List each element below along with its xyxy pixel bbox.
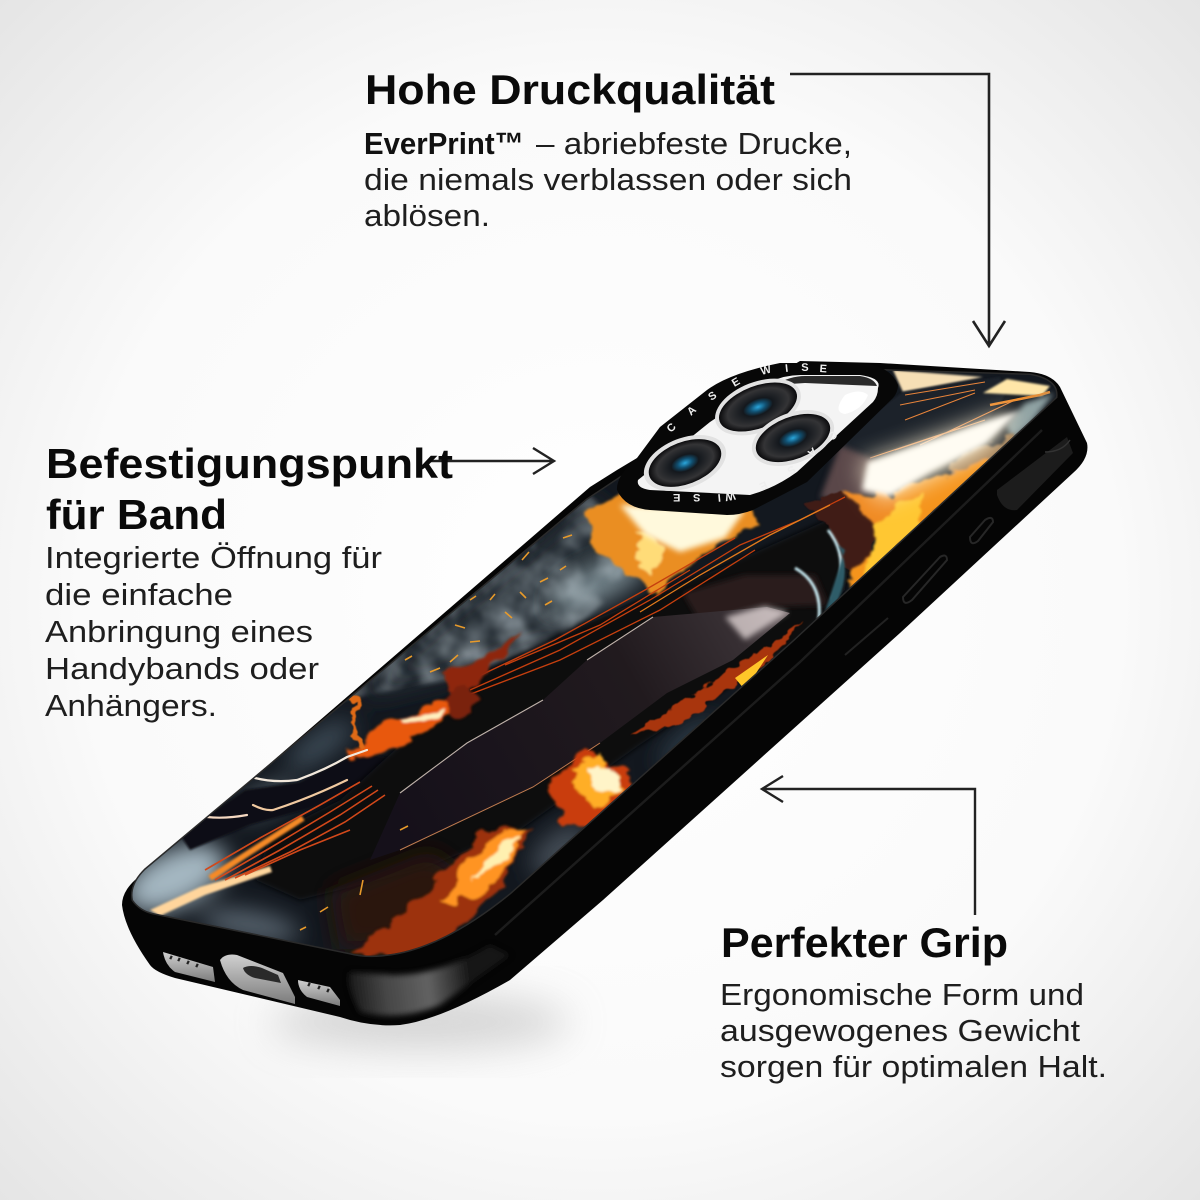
top-right dark wing <box>846 378 1004 454</box>
text block: print quality: die niemals verblassen oder sich <box>364 162 852 197</box>
phone case <box>113 360 1087 1025</box>
arrow: to printed back <box>790 74 1005 346</box>
upper thigh <box>683 573 828 614</box>
smoke texture <box>348 496 624 701</box>
brand lettering top: CASEWISE <box>665 362 827 435</box>
text block: grip <box>720 977 1107 1084</box>
brown rock right <box>805 492 880 575</box>
phone shadow <box>270 994 570 1050</box>
blue-white highlight <box>795 530 841 625</box>
case side details <box>495 430 1073 935</box>
charging port <box>220 955 295 1004</box>
wing light lines <box>870 382 1015 458</box>
text block: strap attachment: Anhängers. <box>45 688 217 723</box>
lens right <box>744 399 842 477</box>
lens left <box>636 424 734 502</box>
screen rim <box>132 368 1056 956</box>
bottom corner highlight <box>349 945 510 1016</box>
smoke and sky <box>113 495 728 947</box>
orange strands on body <box>455 497 845 700</box>
callout: strap attachment <box>45 440 453 723</box>
text block: print quality: ablösen. <box>364 198 490 233</box>
callout: grip <box>720 919 1107 1084</box>
bottom fire <box>350 825 530 960</box>
dark figure <box>255 505 860 900</box>
text block: print quality: – abriebfeste Drucke, <box>536 126 852 161</box>
right speaker <box>298 980 340 1006</box>
bottom left streaks <box>150 782 385 916</box>
lens top <box>707 368 809 446</box>
wing dark bands <box>180 752 400 850</box>
white flare right <box>862 411 1020 496</box>
text block: strap attachment: Handybands oder <box>45 651 319 686</box>
lower centre fire <box>550 748 630 825</box>
text block: strap attachment: die einfache <box>45 577 233 612</box>
flames right <box>841 432 1015 588</box>
text block: grip: sorgen für optimalen Halt. <box>720 1049 1107 1084</box>
arrow: to side grip <box>762 776 975 915</box>
text block: strap attachment: Integrierte Öffnung für <box>45 540 382 575</box>
white flare glow <box>860 412 1020 500</box>
white glow under camera <box>620 505 745 552</box>
heading: grip: Perfekter Grip <box>721 919 1008 966</box>
text block: grip: ausgewogenes Gewicht <box>720 1013 1080 1048</box>
text block: print quality: EverPrint™ <box>364 126 524 161</box>
top-right blue sky <box>1006 393 1054 440</box>
brand lettering bottom: CASEWISE <box>673 428 839 503</box>
orange band below leg <box>630 622 803 735</box>
arrow: to strap point <box>430 448 554 474</box>
camera bump <box>617 362 898 515</box>
heading: strap attachment: Befestigungspunkt <box>46 440 453 487</box>
top-right cream sky <box>893 370 983 392</box>
leg <box>370 607 790 860</box>
text block: grip: Ergonomische Form und <box>720 977 1084 1012</box>
text block: strap attachment: Anbringung eines <box>45 614 313 649</box>
callout: print quality <box>364 66 852 233</box>
top-right bright sky <box>983 379 1050 396</box>
sparks <box>300 535 572 930</box>
left speaker <box>163 952 215 982</box>
printed artwork <box>113 360 1070 970</box>
text block: print quality <box>364 126 852 233</box>
mid-left fire <box>345 632 520 755</box>
heading: print quality: Hohe Druckqualität <box>365 66 775 113</box>
wing highlights <box>207 750 367 818</box>
heading: strap attachment <box>46 440 453 538</box>
text block: strap attachment <box>45 540 382 723</box>
fire tendril <box>347 697 362 750</box>
case body <box>122 361 1087 1025</box>
brown smoke right <box>818 444 875 500</box>
flames under camera <box>585 490 760 595</box>
heading: strap attachment: für Band <box>46 491 227 538</box>
